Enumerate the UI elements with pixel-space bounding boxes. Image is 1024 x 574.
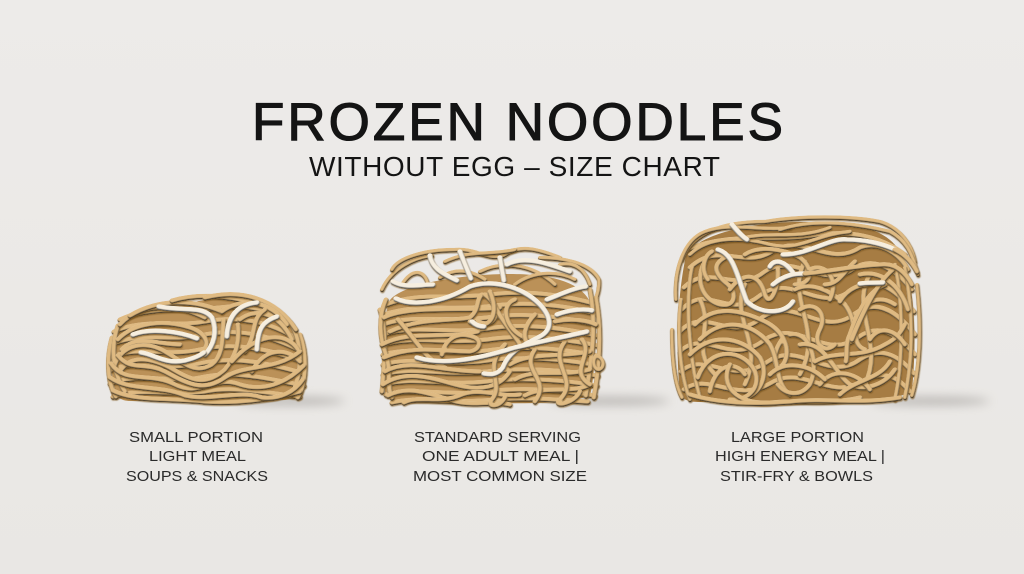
label: small portion: LIGHT MEAL: [149, 448, 246, 465]
label: small portion: [126, 429, 268, 485]
subtitle: WITHOUT EGG – SIZE CHART: [309, 151, 720, 182]
label: small portion: SMALL PORTION: [129, 429, 263, 446]
title: FROZEN NOODLES: [252, 93, 783, 152]
large noodle block: [672, 218, 990, 405]
label: standard serving: MOST COMMON SIZE: [413, 468, 587, 485]
label: large portion: [715, 429, 885, 485]
standard noodle block: [380, 249, 670, 406]
label: standard serving: [413, 429, 587, 485]
label: small portion: SOUPS & SNACKS: [126, 468, 268, 485]
label: large portion: STIR-FRY & BOWLS: [720, 468, 873, 485]
label: standard serving: ONE ADULT MEAL |: [422, 448, 579, 465]
label: large portion: HIGH ENERGY MEAL |: [715, 448, 885, 465]
label: standard serving: STANDARD SERVING: [414, 429, 581, 446]
small noodle block: [109, 295, 345, 405]
label: large portion: LARGE PORTION: [731, 429, 864, 446]
